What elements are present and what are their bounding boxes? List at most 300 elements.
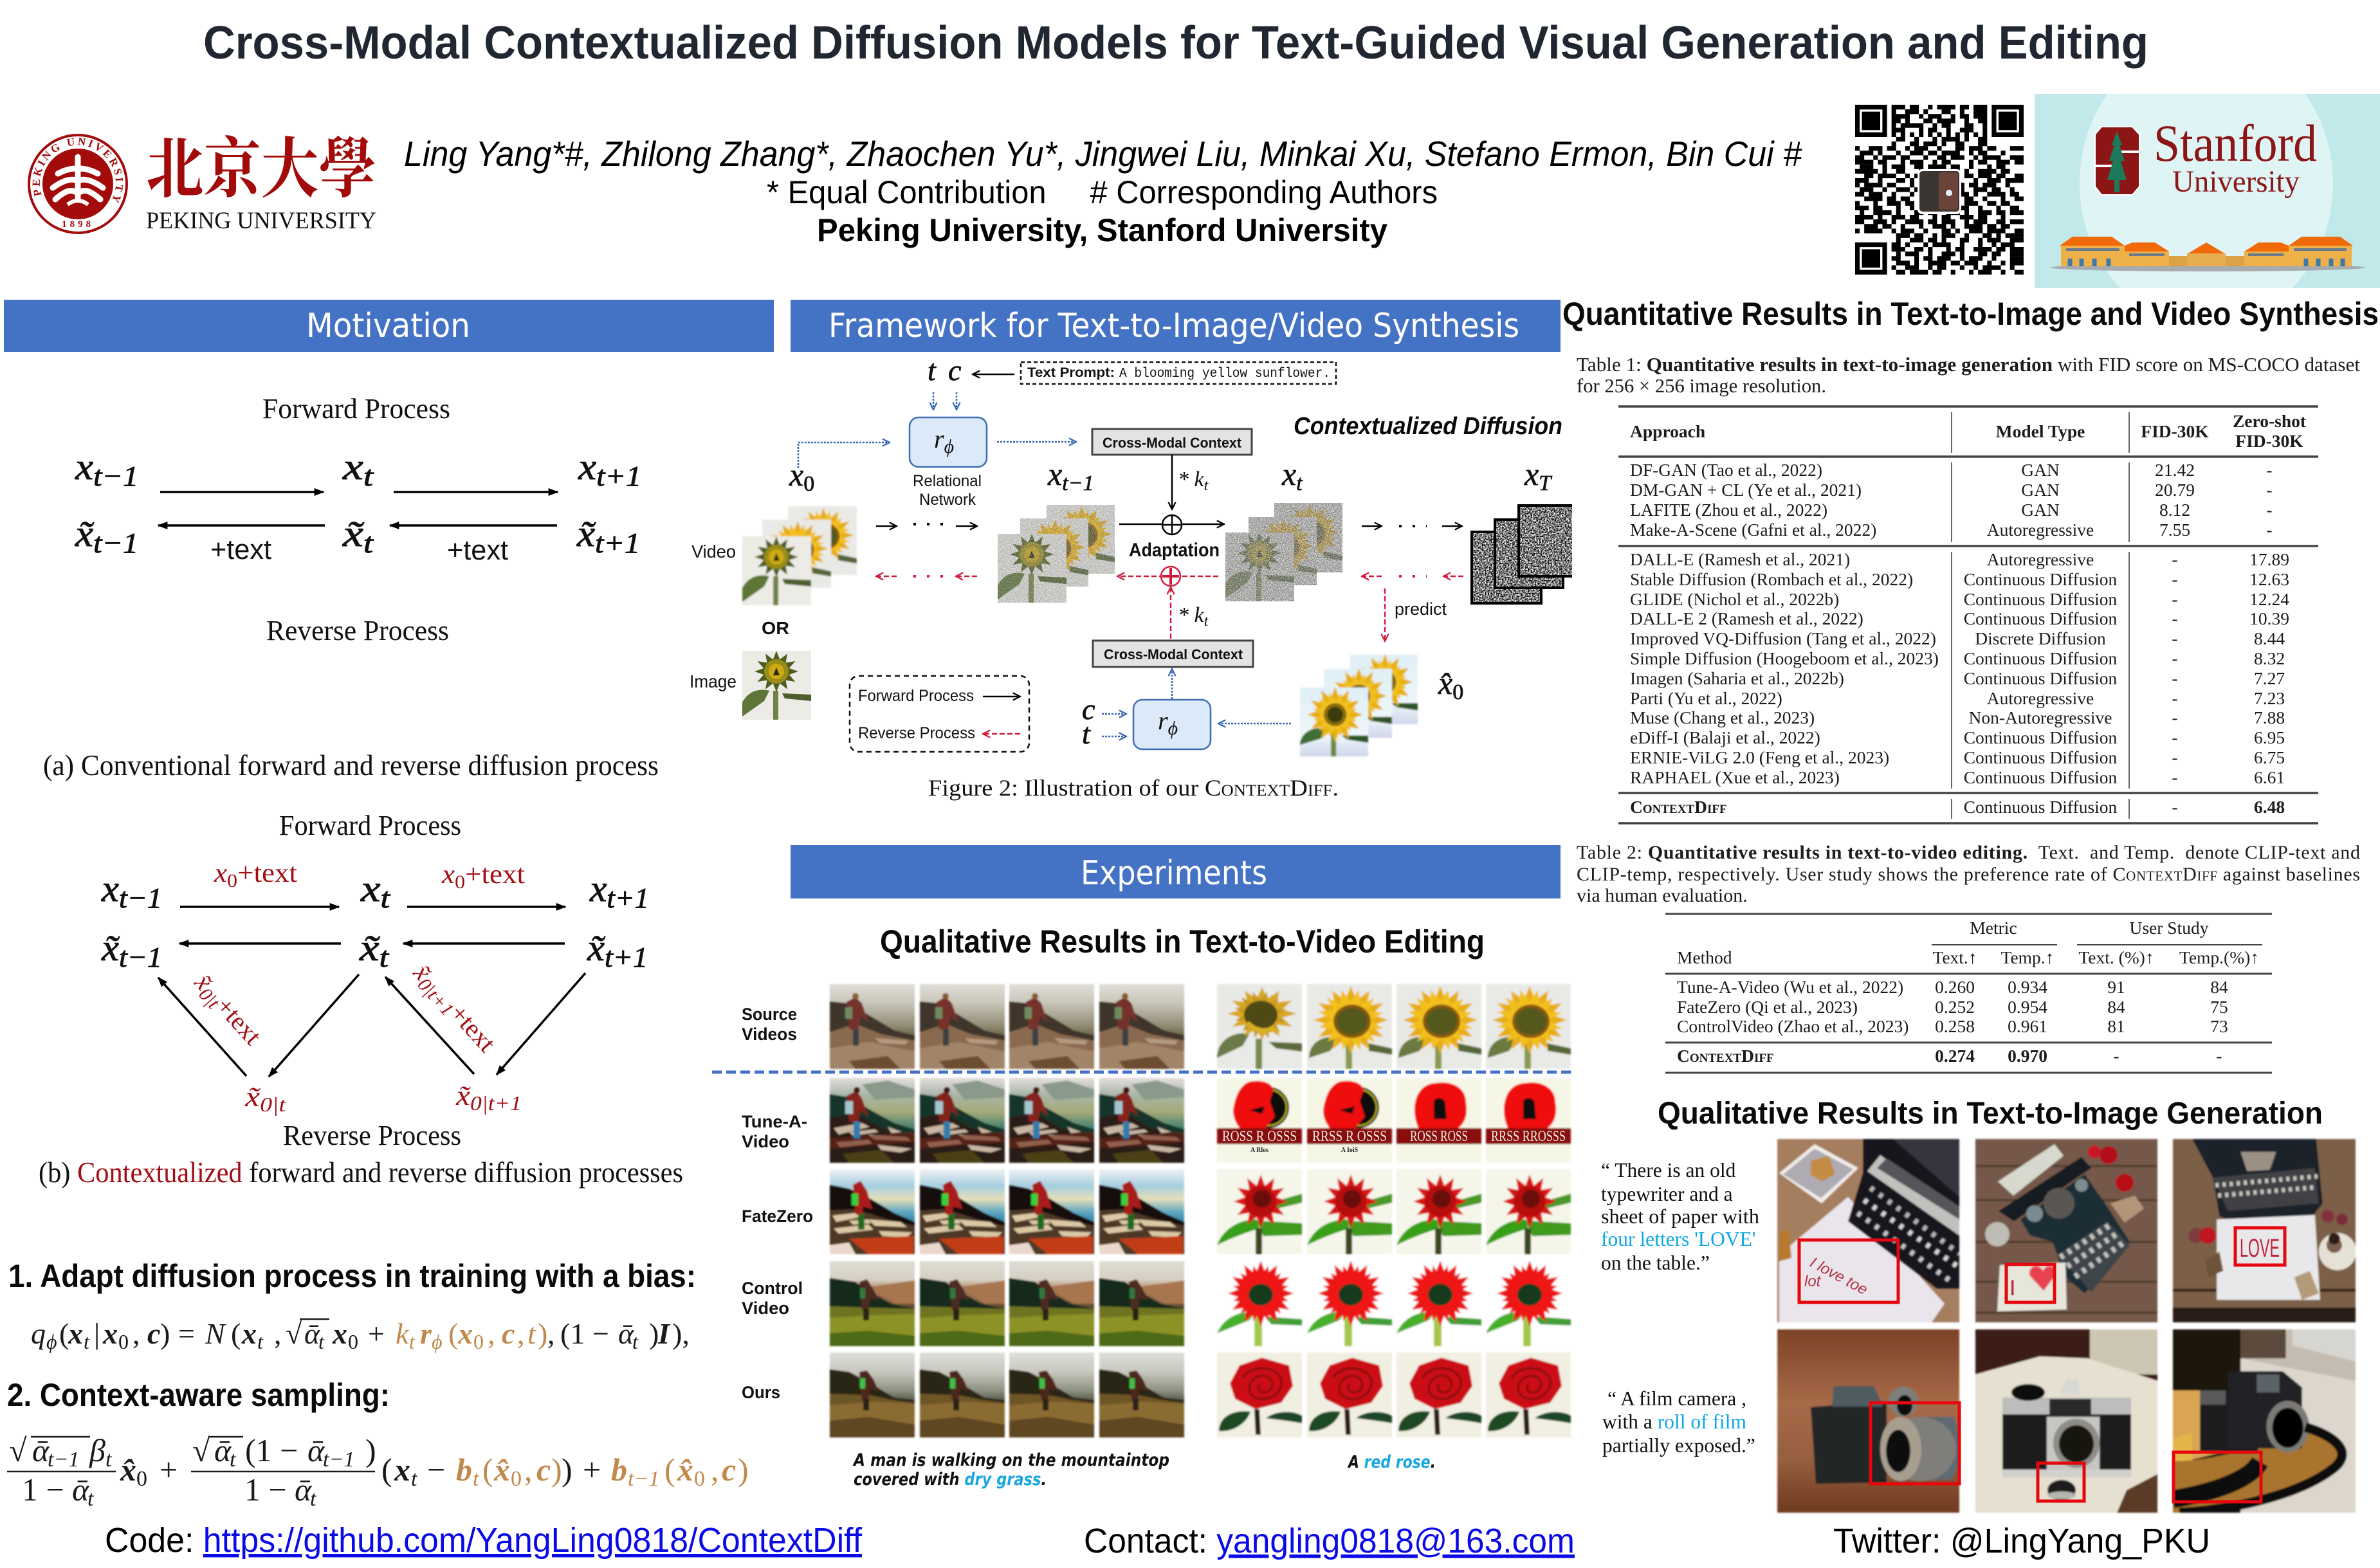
formula: forward process with bias: , (517, 1317, 525, 1350)
table 2 header: Text. (%)↑ (2078, 947, 2154, 967)
math state labels: x (102, 868, 118, 909)
generated images: typewriter row: lot (1804, 1273, 1822, 1290)
image stack: noisier frames (1225, 501, 1342, 601)
University wordmark: University (2172, 165, 2300, 199)
math state labels: t+1 (605, 942, 648, 973)
math labels t c: t (928, 354, 937, 387)
table 1 approach column: DM-GAN + CL (Ye et al., 2021) (1630, 480, 1862, 500)
formula: context-aware sampling: t (230, 1448, 237, 1472)
formula: context-aware sampling: β (89, 1432, 105, 1468)
state labels: t (1296, 471, 1303, 495)
cross-modal context box bottom (1093, 641, 1253, 667)
labels: x0+text: x (214, 859, 227, 888)
labels: x0+text (214, 859, 525, 893)
formula: forward process with bias: , (488, 1317, 495, 1350)
formula: forward process with bias: c (147, 1317, 160, 1350)
formula: forward process with bias: ) (538, 1317, 547, 1350)
small banner captions (1250, 1147, 1359, 1154)
table 1 approach column: Simple Diffusion (Hoogeboom et al., 2023) (1630, 648, 1939, 668)
table 1 zero-shot column: 10.39 (2249, 608, 2289, 628)
formula: forward process with bias: 0 (348, 1330, 358, 1353)
row labels: Tune-A- (742, 1112, 807, 1131)
table 1 approach column: DALL-E (Ramesh et al., 2021) (1630, 549, 1850, 569)
title: Cross-Modal Contextualized Diffusion Models for Text-Guided Visual Generation and Editing (203, 17, 2148, 69)
section header: Framework (791, 300, 1561, 352)
formula: forward process with bias: ᾱ (304, 1317, 320, 1350)
table 1 FID column: - (2172, 707, 2178, 727)
frames: mountain video (830, 984, 1184, 1437)
formula: forward process with bias: t (632, 1330, 639, 1353)
table 2 caption: via human evaluation. (1577, 885, 1748, 906)
relational network box lower: ϕ (1168, 718, 1178, 739)
arrows (158, 492, 558, 525)
table 2 rows: 73 (2210, 1016, 2228, 1036)
table 1 zero-shot column: 17.89 (2249, 549, 2289, 569)
table 1 approach column: DF-GAN (Tao et al., 2022) (1630, 460, 1822, 480)
math labels t c: c (948, 354, 961, 387)
formula: context-aware sampling: t (411, 1467, 418, 1491)
quote: typewriter prompt: “ There is an old (1601, 1159, 1736, 1181)
formula: forward process with bias: x (457, 1317, 473, 1350)
label: relational network: Network (919, 491, 976, 509)
rotated red labels (187, 958, 502, 1059)
labels: x0+text: 0 (455, 871, 465, 893)
formula: forward process with bias: t (318, 1330, 325, 1353)
state labels (789, 456, 1552, 704)
table 2 rows: 84 (2210, 977, 2228, 997)
state labels: 0 (1452, 680, 1463, 704)
relational network box: r (934, 424, 944, 453)
state labels: t−1 (1062, 471, 1094, 495)
table 1 approach column: Parti (Yu et al., 2022) (1630, 688, 1782, 708)
icon: Peking University seal (28, 134, 128, 234)
formula: forward process with bias: ), (672, 1317, 690, 1350)
table 1 zero-shot column: 7.88 (2254, 707, 2285, 727)
icon: Peking University seal: 1898 (62, 219, 94, 230)
quote: camera prompt: with a roll of film (1602, 1410, 1746, 1433)
divider: dashed separator (712, 1070, 1575, 1074)
formula: forward process with bias: t (257, 1330, 264, 1353)
section header: Motivation (4, 300, 774, 352)
formula: forward process with bias: ( (59, 1317, 69, 1350)
logo: Chinese name: 北京大學 (146, 117, 376, 211)
formula: forward process with bias: = (178, 1317, 195, 1350)
table 1 header: FID-30K (2235, 431, 2303, 451)
row labels: Ours (742, 1383, 780, 1402)
table 2 rows: 0.260 (1935, 977, 1975, 997)
row labels: Source (742, 1005, 797, 1024)
state labels: x (1048, 456, 1062, 492)
formula: context-aware sampling: ( (381, 1452, 392, 1488)
table 1 FID column: - (2172, 549, 2178, 569)
formula: forward process with bias: ) (649, 1317, 659, 1350)
state labels: x̂ (1438, 665, 1452, 701)
table 1 FID column: - (2172, 648, 2178, 668)
image stack: pure noise (1472, 506, 1572, 603)
math state labels (75, 446, 641, 559)
table 1 zero-shot column: - (2266, 520, 2273, 540)
quote: typewriter prompt: on the table.” (1601, 1252, 1710, 1274)
table 1 FID column: - (2172, 767, 2178, 787)
table 1 zero-shot column: 7.23 (2254, 688, 2285, 708)
text prompt box: A blooming yellow sunflower. (1119, 367, 1330, 381)
state labels: x (1282, 456, 1296, 492)
arrows (158, 907, 585, 1077)
blue dotted arrows to r_phi (798, 392, 1076, 468)
table 1 zero-shot column: 8.32 (2254, 648, 2285, 668)
quote: typewriter prompt: four letters 'LOVE' (1601, 1228, 1756, 1250)
formula: context-aware sampling: t (473, 1467, 480, 1491)
table 2 rows: ControlVideo (Zhao et al., 2023) (1677, 1016, 1909, 1036)
formula: context-aware sampling: ᾱ (295, 1472, 313, 1508)
table 1 zero-shot column: 6.95 (2254, 727, 2285, 747)
math state labels: t−1 (93, 527, 138, 559)
row labels: Video (742, 1299, 789, 1318)
table 1 FID column: 20.79 (2155, 480, 2195, 500)
formula: forward process with bias: (1 (560, 1317, 585, 1350)
state labels: x (1524, 456, 1539, 492)
heading: qualitative results text-to-image: Qualitative Results in Text-to-Image Generation (1658, 1097, 2323, 1131)
table 1 FID column: - (2172, 668, 2178, 688)
formula: forward process with bias: N (205, 1317, 226, 1350)
small banner captions: A Rlos (1250, 1147, 1268, 1154)
formula: context-aware sampling: t (310, 1487, 317, 1511)
relational network box (910, 417, 987, 467)
label: multiply k_t upper: * k (1178, 468, 1204, 491)
table 1 header: Model Type (1996, 421, 2085, 441)
table 2 caption: CLIP-temp, respectively. User study shows the preference rate of ContextDiff against baselines (1577, 864, 2360, 885)
math state labels: t (381, 882, 391, 914)
table 1 zero-shot column: 6.75 (2254, 747, 2285, 767)
label: forward process: Forward Process (262, 393, 450, 424)
math state labels: t+1 (595, 527, 640, 559)
icon: plus circle reverse (1161, 567, 1180, 586)
table 1 FID column: - (2172, 589, 2178, 609)
footer: code link: Code: https://github.com/YangLing0818/ContextDiff (105, 1521, 863, 1560)
heading: context-aware sampling: 2. Context-aware sampling: (7, 1377, 390, 1413)
math state labels: x̃ (343, 513, 360, 554)
heading: contextualized diffusion: Contextualized Diffusion (1294, 413, 1562, 440)
table 1 FID column: - (2172, 797, 2178, 817)
table 2 header: Temp.↑ (2001, 947, 2054, 967)
table 1 FID column: - (2172, 569, 2178, 589)
rotated red labels: x̃ (189, 967, 219, 996)
banner text in Tune-A-Video flower frames (1222, 1128, 1566, 1144)
math state labels: t (363, 460, 374, 492)
banner text in Tune-A-Video flower frames: RRSS R OSSS (1312, 1128, 1387, 1144)
formula: forward process with bias: ) (160, 1317, 170, 1350)
table 2 rows: - (2216, 1046, 2222, 1066)
table 1 zero-shot column: 12.24 (2249, 589, 2289, 609)
caption: rose prompt: A red rose. (1347, 1452, 1436, 1472)
table 2 header (1677, 918, 2259, 967)
table 1 model type column: GAN (2021, 460, 2060, 480)
state labels: T (1539, 471, 1552, 495)
table 2 rows: 0.970 (2008, 1046, 2047, 1066)
formula: context-aware sampling: ) (551, 1452, 562, 1488)
formula: forward process with bias: , (547, 1317, 554, 1350)
table 2 header: User Study (2129, 918, 2209, 938)
math state labels: x (361, 868, 378, 909)
labels: +text: +text (447, 534, 508, 566)
formula: context-aware sampling: 1 − (244, 1472, 295, 1508)
formula: forward process with bias: k (396, 1317, 410, 1350)
math state labels: x (343, 446, 360, 488)
table 1 model type column: Discrete Diffusion (1975, 628, 2106, 648)
formula: context-aware sampling (7, 1432, 749, 1513)
caption: mountain prompt (852, 1450, 1169, 1490)
table 1 header (1630, 411, 2307, 451)
reverse red arrows and dots (876, 576, 1463, 641)
table 1 (1618, 406, 2318, 823)
quote: camera prompt (1602, 1387, 1755, 1457)
rotated red labels: 0|t (194, 983, 224, 1014)
table 2 header: Text.↑ (1932, 947, 1977, 967)
table 1 approach column: GLIDE (Nichol et al., 2022b) (1630, 589, 1839, 609)
formula: context-aware sampling: ( (482, 1452, 493, 1488)
table 1 approach column: LAFITE (Zhou et al., 2022) (1630, 500, 1827, 520)
labels: predicted x0: x̃ (245, 1081, 258, 1113)
labels: video, or, image: Video (691, 542, 736, 561)
formula: forward process with bias: 0 (473, 1330, 484, 1353)
formula: context-aware sampling: ) (365, 1432, 376, 1468)
footer: twitter: Twitter: @LingYang_PKU (1833, 1522, 2210, 1560)
figure caption: Figure 2: Illustration of our ContextDiff . (928, 775, 1339, 801)
table 1 header: Approach (1630, 421, 1705, 441)
table 1 zero-shot column: 12.63 (2249, 569, 2289, 589)
table 1 FID column (2155, 460, 2195, 817)
math state labels: t+1 (607, 882, 649, 914)
table 1 zero-shot column: 8.44 (2254, 628, 2285, 648)
table 1 zero-shot column: - (2266, 460, 2273, 480)
quote: typewriter prompt: typewriter and a (1601, 1183, 1733, 1205)
table 1 zero-shot column: - (2266, 480, 2273, 500)
formula: forward process with bias: t (409, 1330, 416, 1353)
formula: forward process with bias: x (332, 1317, 347, 1350)
frames: flower video (1217, 981, 1571, 1437)
quote: typewriter prompt: sheet of paper with (1601, 1205, 1759, 1228)
label: multiply k_t lower: t (1204, 613, 1209, 630)
table 1 FID column: 7.55 (2159, 520, 2190, 540)
labels: predicted x0 (244, 1080, 522, 1116)
QR centre photo (1918, 169, 1961, 214)
row labels: Videos (742, 1025, 797, 1044)
table 1 model type column: Continuous Diffusion (1964, 668, 2118, 688)
relational network box lower (1133, 700, 1211, 749)
formula: context-aware sampling: √ (9, 1432, 27, 1468)
table 1 zero-shot column (2249, 460, 2289, 817)
formula: forward process with bias: x (241, 1317, 257, 1350)
labels: +text (210, 534, 508, 566)
cross-modal context box bottom: Cross-Modal Context (1104, 646, 1243, 662)
table 1 approach column: Make-A-Scene (Gafni et al., 2022) (1630, 520, 1876, 540)
table 1 model type column: Continuous Diffusion (1964, 589, 2118, 609)
image stack: clean video frames (742, 504, 857, 605)
forward arrows and dots (876, 455, 1462, 526)
table 1 approach column: Muse (Chang et al., 2023) (1630, 707, 1815, 727)
icon: Stanford S with tree (2094, 127, 2140, 195)
formula: context-aware sampling: 0 (136, 1467, 147, 1491)
formula: forward process with bias: , (274, 1317, 282, 1350)
formula: forward process with bias: ( (231, 1317, 241, 1350)
label: adaptation: Adaptation (1129, 540, 1220, 561)
formula: context-aware sampling: ) (562, 1452, 572, 1488)
table 1 zero-shot column: - (2266, 500, 2273, 520)
table 1 FID column: - (2172, 608, 2178, 628)
formula: forward process with bias: , (133, 1317, 140, 1350)
table 2 rows: 91 (2107, 977, 2125, 997)
affiliations: Peking University, Stanford University (817, 212, 1387, 248)
labels c t lower: t (1082, 717, 1091, 750)
table 1 model type column: Continuous Diffusion (1964, 727, 2118, 747)
icon: Peking University seal: PEKING UNIVERSITY (32, 138, 124, 203)
labels: x0+text: x (441, 860, 455, 889)
table 2 rows: 0.954 (2008, 997, 2047, 1017)
table 2 rows: 0.961 (2008, 1016, 2047, 1036)
formula: context-aware sampling: ᾱ (214, 1432, 232, 1468)
heading: adapt diffusion process: 1. Adapt diffusion process in training with a bias: (8, 1258, 696, 1294)
text prompt box: Text Prompt: (1027, 365, 1115, 380)
QR code (1855, 105, 2024, 275)
rotated red labels: x̃ (408, 958, 437, 987)
labels c t lower: c (1082, 693, 1095, 725)
cross-modal context box top: Cross-Modal Context (1103, 435, 1242, 451)
formula: context-aware sampling: b (611, 1452, 627, 1488)
labels: x0+text: +text (465, 860, 525, 889)
label: forward process: Forward Process (279, 810, 461, 841)
formula: forward process with bias: ϕ (46, 1330, 57, 1353)
table 1 caption (1577, 353, 2360, 397)
formula: context-aware sampling: c (536, 1452, 551, 1488)
formula: forward process with bias: t (527, 1317, 536, 1350)
table 1 caption: for 256 × 256 image resolution. (1577, 374, 1826, 397)
labels: x0+text: +text (237, 859, 297, 888)
table 2 rows: 0.258 (1935, 1016, 1975, 1036)
table 1 approach column: ContextDiff (1630, 797, 1727, 817)
formula: forward process with bias: | (94, 1317, 100, 1350)
table 2 rows: 0.934 (2008, 977, 2047, 997)
cross-modal context box top (1092, 429, 1252, 455)
relational network box: ϕ (944, 436, 954, 457)
red highlight boxes (1799, 1228, 2285, 1502)
labels: x0+text: 0 (227, 870, 237, 891)
formula: context-aware sampling: , (524, 1452, 533, 1488)
table 1 header: FID-30K (2141, 421, 2209, 441)
banner text in Tune-A-Video flower frames: ROSS R OSSS (1222, 1128, 1297, 1144)
authors: Ling Yang*#, Zhilong Zhang*, Zhaochen Yu*, Jingwei Liu, Minkai Xu, Stefano Ermon, Bin Cui # (404, 134, 1802, 174)
labels: predicted x0: 0|t+1 (470, 1091, 522, 1115)
Stanford wordmark: Stanford (2154, 114, 2317, 172)
panel: video editing comparison grid (712, 981, 1575, 1490)
table 2 rows: ContextDiff (1677, 1046, 1774, 1066)
table 2 rows: 0.274 (1935, 1046, 1975, 1066)
labels c t lower (1082, 693, 1095, 750)
table 1 FID column: 21.42 (2155, 460, 2195, 480)
formula: forward process with bias: c (502, 1317, 515, 1350)
table 1 approach column (1630, 460, 1939, 817)
table 1 model type column (1964, 460, 2118, 817)
table 2 rows: FateZero (Qi et al., 2023) (1677, 997, 1858, 1017)
legend box (850, 676, 1029, 752)
label: relational network (913, 472, 982, 509)
table 2 caption: Table 2: Quantitative results in text-to-video editing. Text. and Temp. denote CLIP-text and (1577, 842, 2360, 863)
table 2 rows: 75 (2210, 997, 2228, 1017)
formula: forward process with bias (31, 1317, 690, 1353)
math state labels: t (380, 942, 390, 973)
formula: context-aware sampling: ) (738, 1452, 749, 1488)
formula: forward process with bias: t (84, 1330, 90, 1353)
table 1 model type column: Continuous Diffusion (1964, 767, 2118, 787)
generated images: typewriter row: I (2009, 1276, 2015, 1300)
formula: context-aware sampling: 0 (511, 1467, 522, 1491)
table 1 model type column: GAN (2021, 480, 2060, 500)
label: multiply k_t lower: * k (1178, 603, 1204, 627)
table 1 FID column: - (2172, 688, 2178, 708)
image: single clean frame (742, 651, 811, 720)
math state labels: x̃ (577, 513, 594, 554)
formula: forward process with bias: I (657, 1317, 671, 1350)
generated images: typewriter row: I love toe (1807, 1253, 1871, 1299)
state labels: x (789, 457, 803, 493)
rotated red labels: +text (444, 999, 502, 1057)
formula: context-aware sampling: t−1 (48, 1448, 79, 1472)
header: Peking University logo (28, 117, 376, 234)
icon: campus building (2050, 237, 2365, 271)
math state labels: x (590, 868, 607, 909)
formula: forward process with bias: ( (448, 1317, 458, 1350)
math state labels: x̃ (360, 927, 376, 969)
formula: context-aware sampling: t−1 (323, 1448, 354, 1472)
formula: forward process with bias: r (420, 1317, 432, 1350)
formula: forward process with bias: ϕ (432, 1330, 443, 1353)
table 1 FID column: - (2172, 628, 2178, 648)
panel: conventional diffusion diagram (43, 393, 682, 781)
caption (b): (b) Contextualized forward and reverse diffusion processes (39, 1156, 683, 1189)
formula: context-aware sampling: + (583, 1452, 601, 1488)
table 2 header: Temp.(%)↑ (2179, 947, 2259, 967)
state labels: 0 (803, 472, 814, 496)
formula: context-aware sampling: b (456, 1452, 472, 1488)
table 1 caption: Table 1: Quantitative results in text-to-image generation with FID score on MS-COCO dataset (1577, 353, 2360, 376)
table 1 approach column: ERNIE-ViLG 2.0 (Feng et al., 2023) (1630, 747, 1889, 767)
image stack: predicted x0 (1300, 653, 1418, 756)
math state labels: t−1 (119, 942, 162, 973)
caption: mountain prompt: A man is walking on the mountaintop (852, 1450, 1169, 1470)
table 1 approach column: Imagen (Saharia et al., 2022b) (1630, 668, 1844, 688)
table 1 model type column: GAN (2021, 500, 2060, 520)
formula: context-aware sampling: (1 − (245, 1432, 306, 1468)
table 1 approach column: Stable Diffusion (Rombach et al., 2022) (1630, 569, 1913, 589)
formula: context-aware sampling: c (722, 1452, 736, 1488)
math state labels: x (75, 446, 92, 488)
table 1 model type column: Autoregressive (1987, 549, 2094, 569)
section header: Experiments: Experiments (1081, 854, 1267, 893)
generated images: typewriter row (1777, 1139, 2356, 1322)
table 1 FID column: 8.12 (2159, 500, 2190, 520)
table 1 model type column: Continuous Diffusion (1964, 747, 2118, 767)
caption: mountain prompt: covered with dry grass. (854, 1470, 1047, 1490)
heading: qualitative results text-to-video: Qualitative Results in Text-to-Video Editing (880, 924, 1485, 960)
table 2 caption (1577, 842, 2360, 906)
table 1 approach column: DALL-E 2 (Ramesh et al., 2022) (1630, 608, 1863, 628)
math state labels: x̃ (587, 927, 604, 969)
banner text in Tune-A-Video flower frames: ROSS ROSS (1410, 1128, 1468, 1144)
generated images: camera row (1777, 1329, 2356, 1513)
formula: context-aware sampling: ᾱ (32, 1432, 50, 1468)
section header: Experiments (791, 845, 1561, 898)
formula: forward process with bias: √ (286, 1317, 302, 1350)
Stanford University logo panel (2035, 94, 2380, 288)
